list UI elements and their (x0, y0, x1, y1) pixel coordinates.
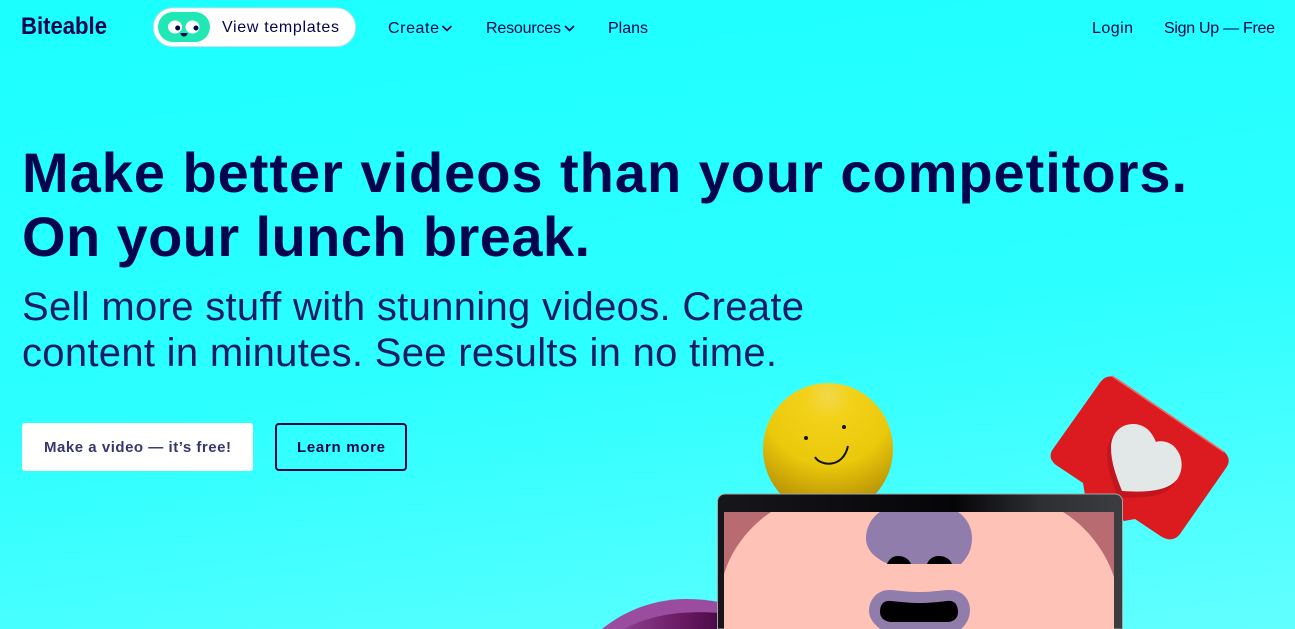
button: learn more: Learn more (297, 439, 385, 456)
icon: green mascot face (158, 12, 210, 42)
button: view templates (154, 8, 356, 46)
headline: On your lunch break. (22, 205, 590, 268)
mouth (869, 590, 970, 629)
navigation: main links: Create (388, 20, 439, 37)
subheading: content in minutes. See results in no time. (22, 331, 777, 375)
navigation: main links: Plans (608, 20, 648, 37)
navigation: account links: Login (1092, 20, 1133, 37)
label: view templates: View templates (222, 19, 339, 36)
laptop bezel (718, 494, 1122, 629)
illustration: purple shape (602, 599, 719, 629)
illustration: laptop (718, 494, 1122, 629)
headline (22, 141, 1187, 268)
nose (866, 512, 972, 564)
nostrils (887, 556, 911, 564)
logo: Biteable: Biteable (21, 13, 107, 40)
headline: Make better videos than your competitors. (22, 141, 1187, 204)
illustration: red heart like bubble (1051, 376, 1229, 539)
illustration: yellow smiley ball (763, 383, 893, 515)
navigation: main links: Resources (486, 20, 561, 37)
button: make a video (22, 423, 253, 471)
laptop screen (724, 512, 1114, 629)
heart shadow (1107, 430, 1178, 498)
subheading (22, 285, 804, 375)
button: make a video: Make a video — it’s free! (44, 439, 231, 456)
navigation: account links: Sign Up — Free (1164, 20, 1275, 37)
subheading: Sell more stuff with stunning videos. Create (22, 285, 804, 329)
icon: white heart (1111, 424, 1182, 492)
navigation: main links (388, 20, 648, 37)
navigation: account links (1092, 20, 1275, 37)
button: learn more (276, 424, 406, 470)
